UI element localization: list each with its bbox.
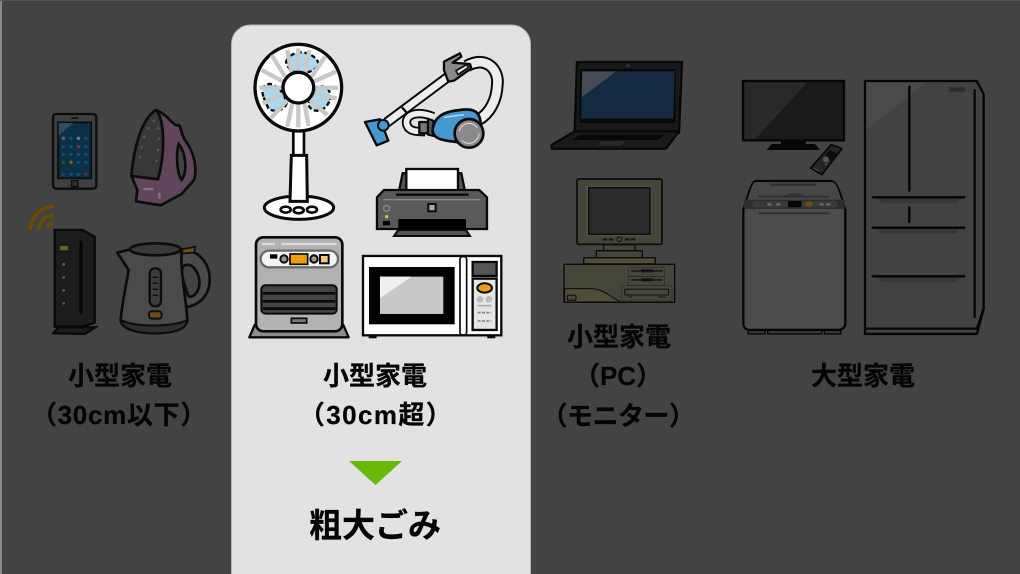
icon: fan heater — [249, 237, 349, 337]
icon: remote control — [811, 145, 842, 175]
label: small appliances over 30cm — [299, 361, 453, 430]
icon: desktop computer with monitor — [564, 179, 675, 302]
icon: laptop — [552, 62, 682, 149]
heading: oversized garbage: 粗大ごみ — [309, 507, 441, 544]
label: small appliances PC and monitor: 小型家電 — [567, 322, 671, 352]
icon: refrigerator — [865, 81, 984, 334]
arrow: down triangle — [349, 461, 402, 485]
label: small appliances under 30cm — [31, 361, 207, 430]
label: small appliances under 30cm: （30cm以下） — [31, 400, 207, 430]
icon: vacuum cleaner — [365, 53, 498, 148]
label: small appliances PC and monitor — [541, 322, 695, 431]
icon: smartphone — [53, 114, 96, 189]
icon: electric fan — [255, 44, 342, 219]
icon: iron — [131, 110, 195, 205]
label: small appliances under 30cm: 小型家電 — [68, 361, 172, 391]
label: large appliances: 大型家電 — [811, 361, 915, 391]
label: small appliances over 30cm: 小型家電 — [323, 361, 427, 391]
label: small appliances PC and monitor: （モニター） — [541, 401, 695, 431]
icon: router — [53, 230, 95, 334]
icon: television — [743, 81, 844, 150]
icon: printer — [377, 169, 487, 236]
icon: kettle — [117, 243, 210, 333]
icon: microwave oven — [363, 256, 501, 338]
label: small appliances over 30cm: （30cm超） — [299, 400, 453, 430]
label: small appliances PC and monitor: （PC） — [574, 361, 662, 391]
panel: highlighted column — [232, 25, 530, 574]
icon: washing machine — [743, 181, 845, 334]
icon: wifi waves — [30, 206, 54, 231]
